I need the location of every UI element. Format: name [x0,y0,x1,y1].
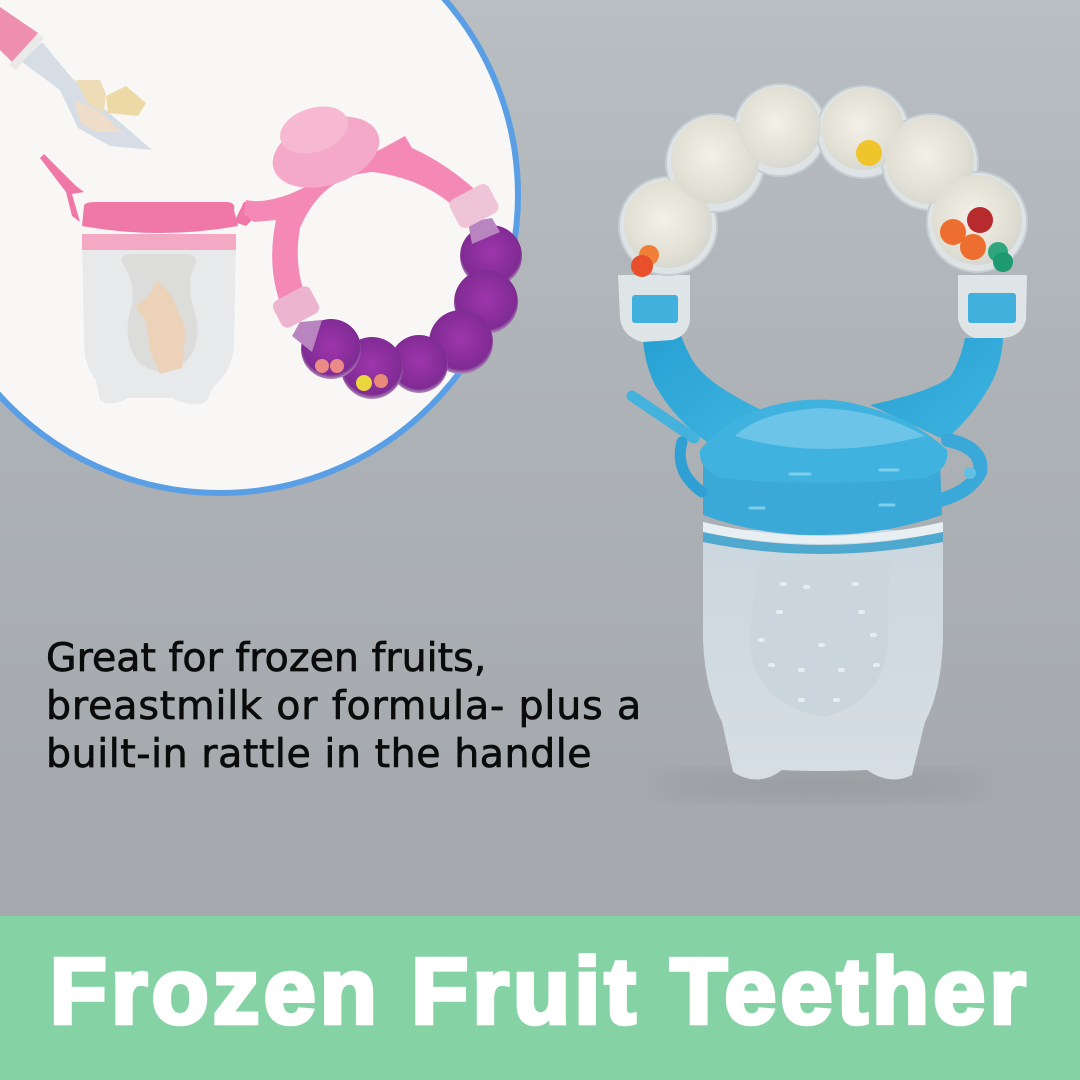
description text: breastmilk or formula- plus a [46,683,642,729]
icon: blue teether with clear rattle handle [618,84,1027,780]
clear mesh feeder body [703,522,943,780]
icon: pink rattle handle with purple beads [244,98,522,399]
rattle pearl beads [619,84,1027,275]
description text: built-in rattle in the handle [46,731,592,777]
blue lid and collar [632,396,980,535]
icon: clear pink feeder with fruit [40,154,258,404]
clear connector sleeves [618,275,1027,342]
blue handle arms [643,333,1003,442]
rattle coloured balls [631,140,1013,277]
description text [46,635,642,777]
description text: Great for frozen fruits, [46,635,486,681]
title banner: Frozen Fruit Teether [50,939,1030,1043]
title banner [0,916,1080,1080]
icon: spoon with fruit pieces [0,7,152,150]
panel: pink feeder inset circle [0,0,522,493]
